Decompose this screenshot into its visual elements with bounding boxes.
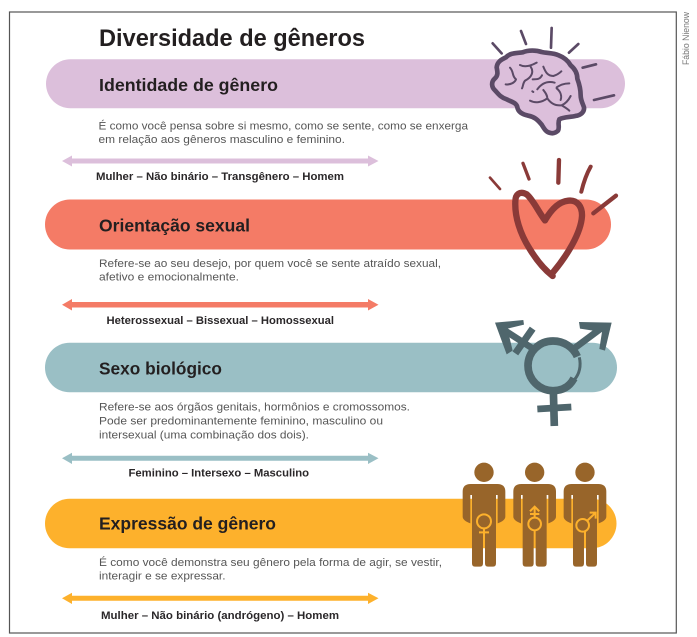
- spectrum labels: Feminino – Intersexo – Masculino: [128, 468, 309, 480]
- band: [45, 200, 611, 250]
- arrow: [62, 156, 378, 166]
- heading: Expressão de gênero: [99, 513, 276, 533]
- description: É como você demonstra seu gênero pela forma de agir, se vestir,: [99, 556, 442, 569]
- band: [45, 343, 617, 392]
- arrow: [62, 453, 378, 464]
- spectrum labels: Mulher – Não binário (andrógeno) – Homem: [101, 610, 339, 622]
- heading: Identidade de gênero: [99, 75, 278, 95]
- icon: transgender symbol: [495, 320, 612, 426]
- figure: feminine: [463, 463, 505, 567]
- icon: three figures: [463, 463, 606, 567]
- figure: masculine: [564, 463, 606, 567]
- description: Refere-se aos órgãos genitais, hormônios e cromossomos.: [99, 402, 410, 414]
- heading: Sexo biológico: [99, 358, 222, 378]
- spectrum labels: Mulher – Não binário – Transgênero – Homem: [96, 171, 344, 183]
- description: É como você pensa sobre si mesmo, como se sente, como se enxerga: [98, 120, 469, 132]
- arrow: [62, 593, 378, 604]
- description: em relação aos gêneros masculino e feminino.: [98, 134, 345, 146]
- heading: Orientação sexual: [99, 216, 250, 236]
- arrow: [62, 299, 378, 310]
- description: afetivo e emocionalmente.: [99, 272, 239, 284]
- figure: non-binary: [513, 463, 556, 567]
- panel: identidade de gênero: [46, 28, 625, 183]
- icon: brain: [492, 28, 614, 133]
- panel: orientação sexual: [45, 160, 616, 327]
- credit: Fábio Nienow: [681, 12, 691, 65]
- icon: heart: [490, 160, 616, 276]
- panel: sexo biológico: [45, 320, 617, 480]
- description: interagir e se expressar.: [99, 570, 226, 582]
- title: Diversidade de gêneros: [99, 25, 365, 52]
- description: Refere-se ao seu desejo, por quem você se sente atraído sexual,: [99, 258, 441, 270]
- panel: expressão de gênero: [45, 463, 616, 622]
- spectrum labels: Heterossexual – Bissexual – Homossexual: [106, 315, 334, 327]
- description: intersexual (uma combinação dos dois).: [99, 429, 309, 441]
- band: [45, 499, 616, 548]
- description: Pode ser predominantemente feminino, masculino ou: [99, 415, 383, 427]
- band: [46, 59, 625, 108]
